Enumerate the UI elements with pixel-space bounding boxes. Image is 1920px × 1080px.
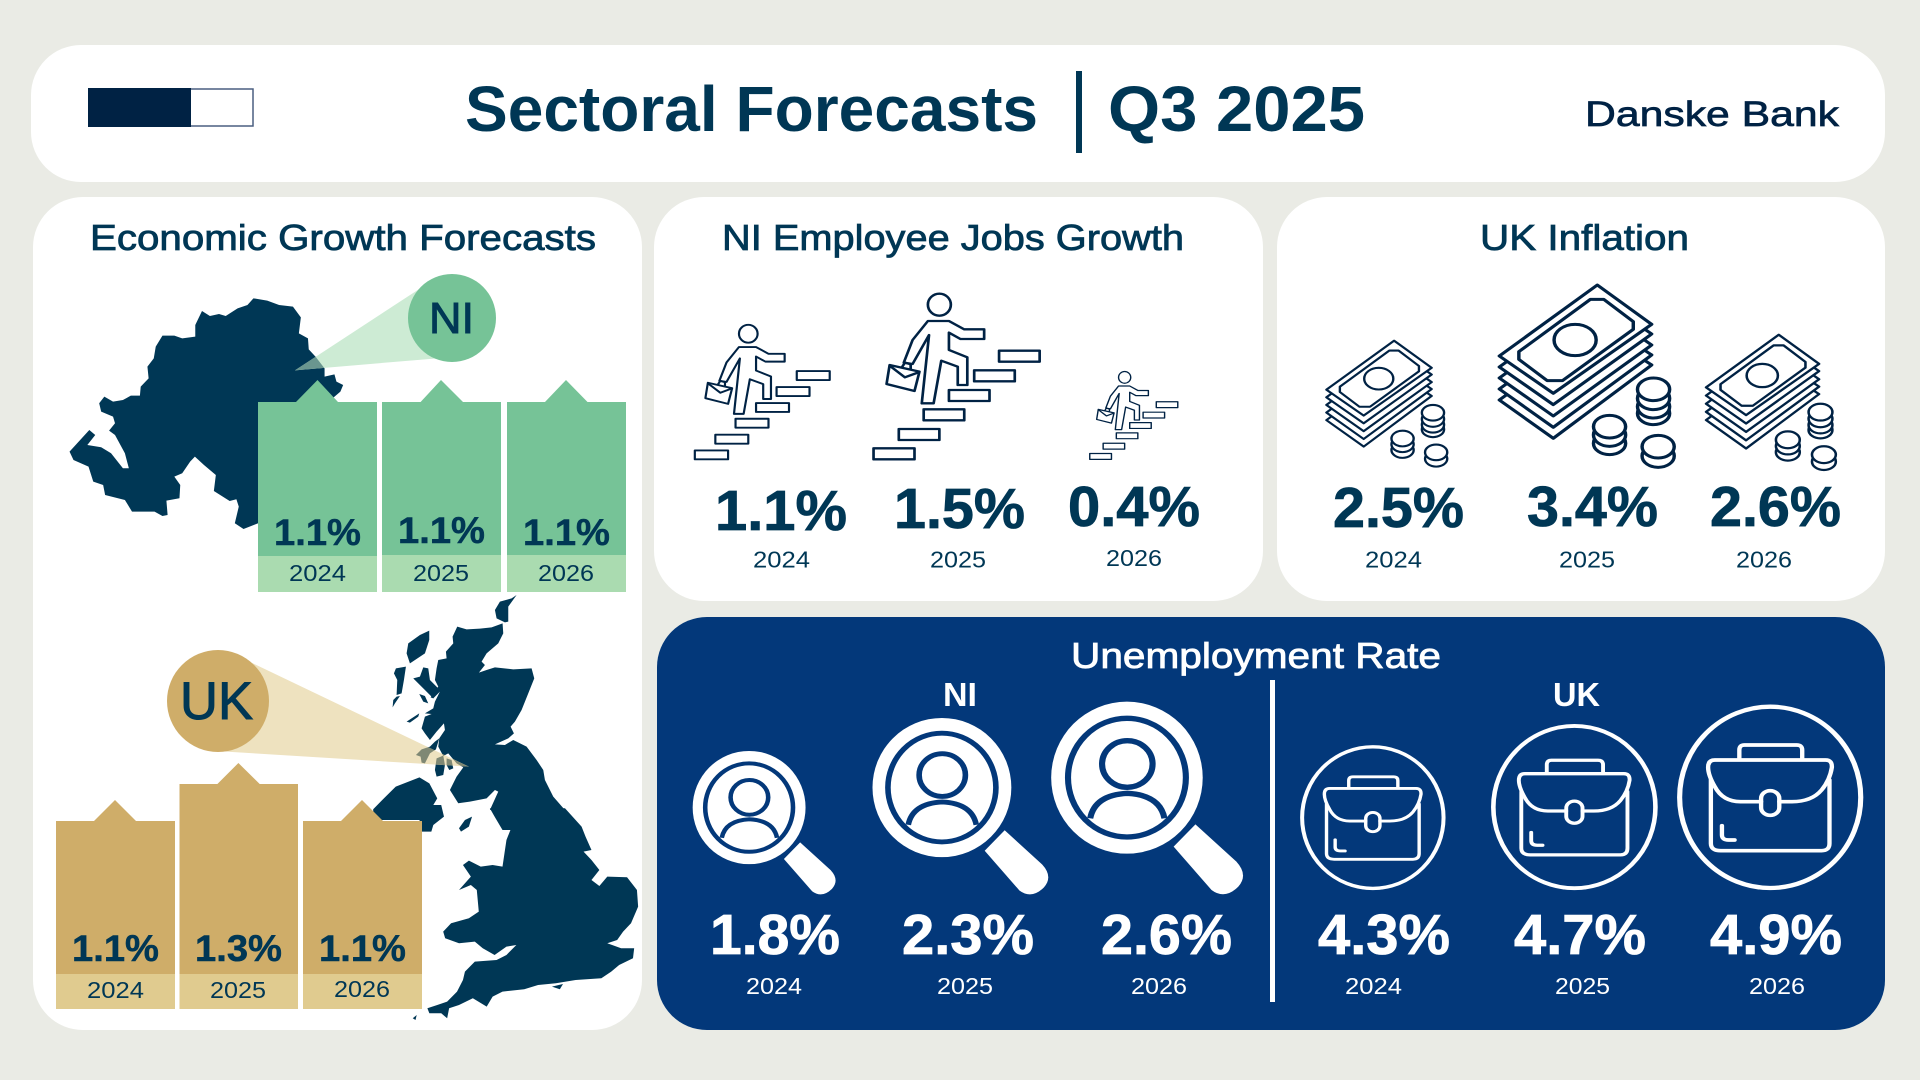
icon: stairs climber 2025	[874, 294, 1040, 459]
inflation 2024 value: 2.5%	[1333, 476, 1464, 540]
inflation 2025 value: 2025	[1559, 547, 1615, 573]
inflation 2026 value: 2026	[1736, 547, 1792, 573]
NI bar 2026: 2026	[538, 560, 594, 586]
map: Northern Ireland	[70, 298, 343, 529]
jobs 2025 value: 2025	[930, 547, 986, 573]
inflation 2024 value: 2024	[1365, 547, 1422, 573]
heading: economic growth: Economic Growth Forecasts	[90, 217, 596, 258]
UK unemployment 2025: 4.7%	[1514, 903, 1646, 967]
icon: briefcase 2026	[1680, 707, 1861, 888]
NI callout	[295, 274, 496, 370]
icon: briefcase 2025	[1493, 726, 1655, 888]
UK unemployment 2024: 2024	[1345, 973, 1402, 999]
NI unemployment 2026: 2026	[1131, 973, 1187, 999]
UK unemployment 2024	[1318, 903, 1450, 999]
jobs 2025 value: 1.5%	[894, 477, 1025, 541]
NI bar 2026	[507, 380, 626, 592]
icon: money stack 2026	[1706, 335, 1836, 470]
heading: inflation: UK Inflation	[1480, 217, 1689, 258]
inflation 2024 value	[1333, 476, 1464, 573]
panel: NI employee jobs growth	[654, 197, 1263, 601]
UK unemployment 2026	[1710, 903, 1842, 999]
UK unemployment 2026: 4.9%	[1710, 903, 1842, 967]
jobs 2026 value: 2026	[1106, 545, 1162, 571]
icon: stairs climber 2026	[1090, 372, 1178, 459]
brand name: Danske Bank	[1585, 95, 1840, 134]
NI unemployment 2024: 2024	[746, 973, 802, 999]
NI bar 2024: 2024	[289, 560, 346, 586]
inflation 2026 value	[1710, 475, 1841, 573]
UK bar 2024: 2024	[87, 977, 144, 1003]
NI bar 2026: 1.1%	[523, 512, 610, 553]
inflation 2026 value: 2.6%	[1710, 475, 1841, 539]
NI bar 2025: 2025	[413, 560, 469, 586]
panel: economic growth forecasts	[33, 197, 642, 1030]
NI unemployment 2025	[902, 903, 1034, 999]
NI bar 2025: 1.1%	[398, 510, 485, 551]
icon: briefcase 2024	[1302, 747, 1444, 888]
NI bar 2025	[382, 380, 501, 592]
logo bar	[88, 88, 253, 127]
NI unemployment 2024: 1.8%	[710, 903, 840, 967]
UK bar 2026: 2026	[334, 976, 390, 1002]
icon: money stack 2025	[1499, 285, 1674, 467]
UK bar 2026: 1.1%	[319, 928, 406, 969]
jobs 2024 value	[715, 479, 847, 573]
map: United Kingdom	[373, 595, 638, 1020]
jobs 2026 value: 0.4%	[1068, 475, 1200, 539]
UK bar 2025: 2025	[210, 977, 266, 1003]
icon: magnifier 2024	[693, 751, 836, 894]
panel: UK inflation	[1277, 197, 1885, 601]
divider between NI and UK	[1270, 680, 1275, 1002]
UK unemployment 2025	[1514, 903, 1646, 999]
inflation 2025 value	[1527, 475, 1658, 573]
label: NI: NI	[943, 676, 977, 713]
NI bar 2024: 1.1%	[274, 512, 361, 553]
UK unemployment 2026: 2026	[1749, 973, 1805, 999]
UK bar 2024	[56, 800, 175, 1009]
UK unemployment 2024: 4.3%	[1318, 903, 1450, 967]
icon: magnifier 2025	[872, 718, 1048, 894]
NI unemployment 2024	[710, 903, 840, 999]
UK bar 2024: 1.1%	[72, 928, 159, 969]
NI unemployment 2026: 2.6%	[1101, 903, 1232, 967]
UK bar 2026	[303, 800, 422, 1009]
jobs 2025 value	[894, 477, 1025, 573]
header panel	[31, 45, 1885, 182]
UK callout	[167, 650, 469, 767]
jobs 2024 value: 1.1%	[715, 479, 847, 543]
UK unemployment 2025: 2025	[1555, 973, 1610, 999]
jobs 2026 value	[1068, 475, 1200, 571]
NI unemployment 2026	[1101, 903, 1232, 999]
panel: unemployment rate	[657, 617, 1885, 1030]
title divider	[1076, 71, 1082, 153]
NI unemployment 2025: 2025	[937, 973, 993, 999]
heading: jobs growth: NI Employee Jobs Growth	[722, 217, 1184, 258]
heading: unemployment: Unemployment Rate	[1071, 635, 1441, 676]
icon: money stack 2024	[1326, 341, 1447, 467]
jobs 2024 value: 2024	[753, 547, 810, 573]
icon: stairs climber 2024	[695, 325, 830, 459]
NI callout: NI	[429, 294, 474, 343]
UK bar 2025: 1.3%	[195, 928, 282, 969]
NI bar 2024	[258, 380, 377, 592]
label: UK: UK	[1553, 676, 1600, 713]
UK bar 2025	[180, 763, 298, 1009]
inflation 2025 value: 3.4%	[1527, 475, 1658, 539]
title quarter: Q3 2025	[1108, 73, 1365, 145]
UK callout: UK	[180, 672, 253, 731]
NI unemployment 2025: 2.3%	[902, 903, 1034, 967]
title: Sectoral Forecasts	[465, 73, 1038, 145]
icon: magnifier 2026	[1051, 702, 1243, 894]
